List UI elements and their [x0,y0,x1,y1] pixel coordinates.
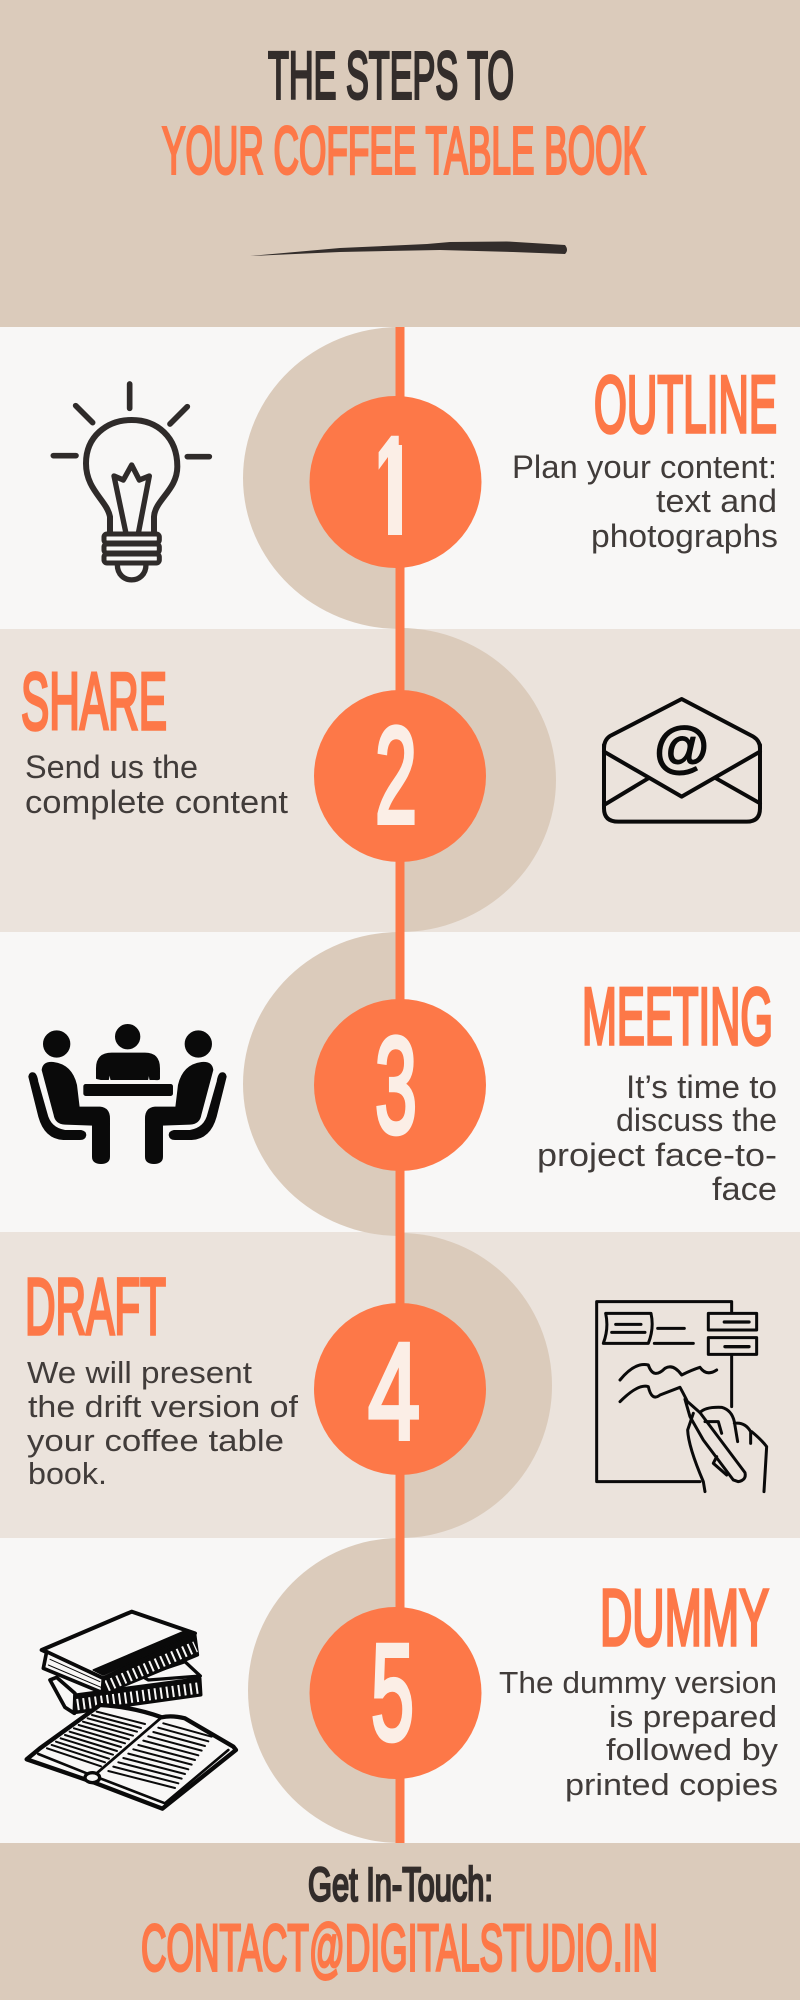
step 3: description: It’s time to [626,1069,777,1105]
step 2: description: complete content [25,784,288,820]
step 2: heading: SHARE [21,657,167,747]
step 4: description: your coffee table [27,1423,284,1458]
half circle step 1 [243,327,400,629]
half circle step 5 [248,1538,400,1843]
step 2: icon envelope [604,699,760,822]
step 3: icon meeting [29,1025,226,1163]
open book [27,1705,236,1809]
panel: footer [0,1843,800,2000]
step 5: description [499,1665,779,1802]
panel: step 2 background [0,629,800,932]
step 1: description: text and [656,483,777,519]
step 2: description [25,749,288,820]
step 2: number badge [314,690,486,862]
step 5: description: is prepared [609,1699,777,1734]
panel: step 1 background [0,327,800,629]
step 5: icon books [27,1612,236,1809]
step 5: number badge [310,1607,482,1779]
panel: header [0,0,800,327]
step 2: icon envelope: @ [654,716,709,779]
step 5: description: printed copies [565,1767,778,1802]
step 1: description: Plan your content: [512,449,777,485]
step 4: icon writing on document [597,1302,767,1492]
half circle step 3 [243,932,400,1236]
step 2: description: Send us the [25,749,198,785]
step 3: description: discuss the [616,1102,777,1138]
half circle step 2 [400,628,556,932]
step 4: description [27,1355,298,1491]
step 4: number badge: 4 [368,1316,420,1468]
step 4: description: the drift version of [28,1389,298,1424]
step 4: description: We will present [27,1355,252,1390]
step 3: description: project face-to- [537,1137,777,1173]
footer label: Get In-Touch: [308,1858,493,1910]
step 3: description: face [712,1171,777,1207]
step 1: icon light bulb [53,384,209,580]
panel: step 4 background [0,1232,800,1538]
step 4: number badge [314,1303,486,1475]
title line 1: THE STEPS TO [268,38,514,114]
panel: step 3 background [0,932,800,1232]
step 1: number badge [310,396,482,568]
timeline vertical line [396,327,404,1843]
panel: step 5 background [0,1538,800,1843]
step 5: description: followed by [606,1732,779,1767]
step 5: number badge: 5 [371,1616,414,1770]
brush stroke divider [250,242,567,256]
step 4: description: book. [28,1456,107,1491]
step 4: heading: DRAFT [25,1262,166,1351]
step 5: description: The dummy version [499,1665,777,1700]
step 3: number badge [314,999,486,1171]
top book [42,1612,198,1693]
step 1: description: photographs [591,518,778,554]
step 1: number badge: 1 [373,410,413,562]
second book [50,1662,201,1713]
step 3: description [537,1069,777,1207]
step 1: description [512,449,778,554]
step 3: number badge: 3 [375,1010,417,1162]
step 2: number badge: 2 [375,700,417,852]
half circle step 4 [400,1233,552,1538]
